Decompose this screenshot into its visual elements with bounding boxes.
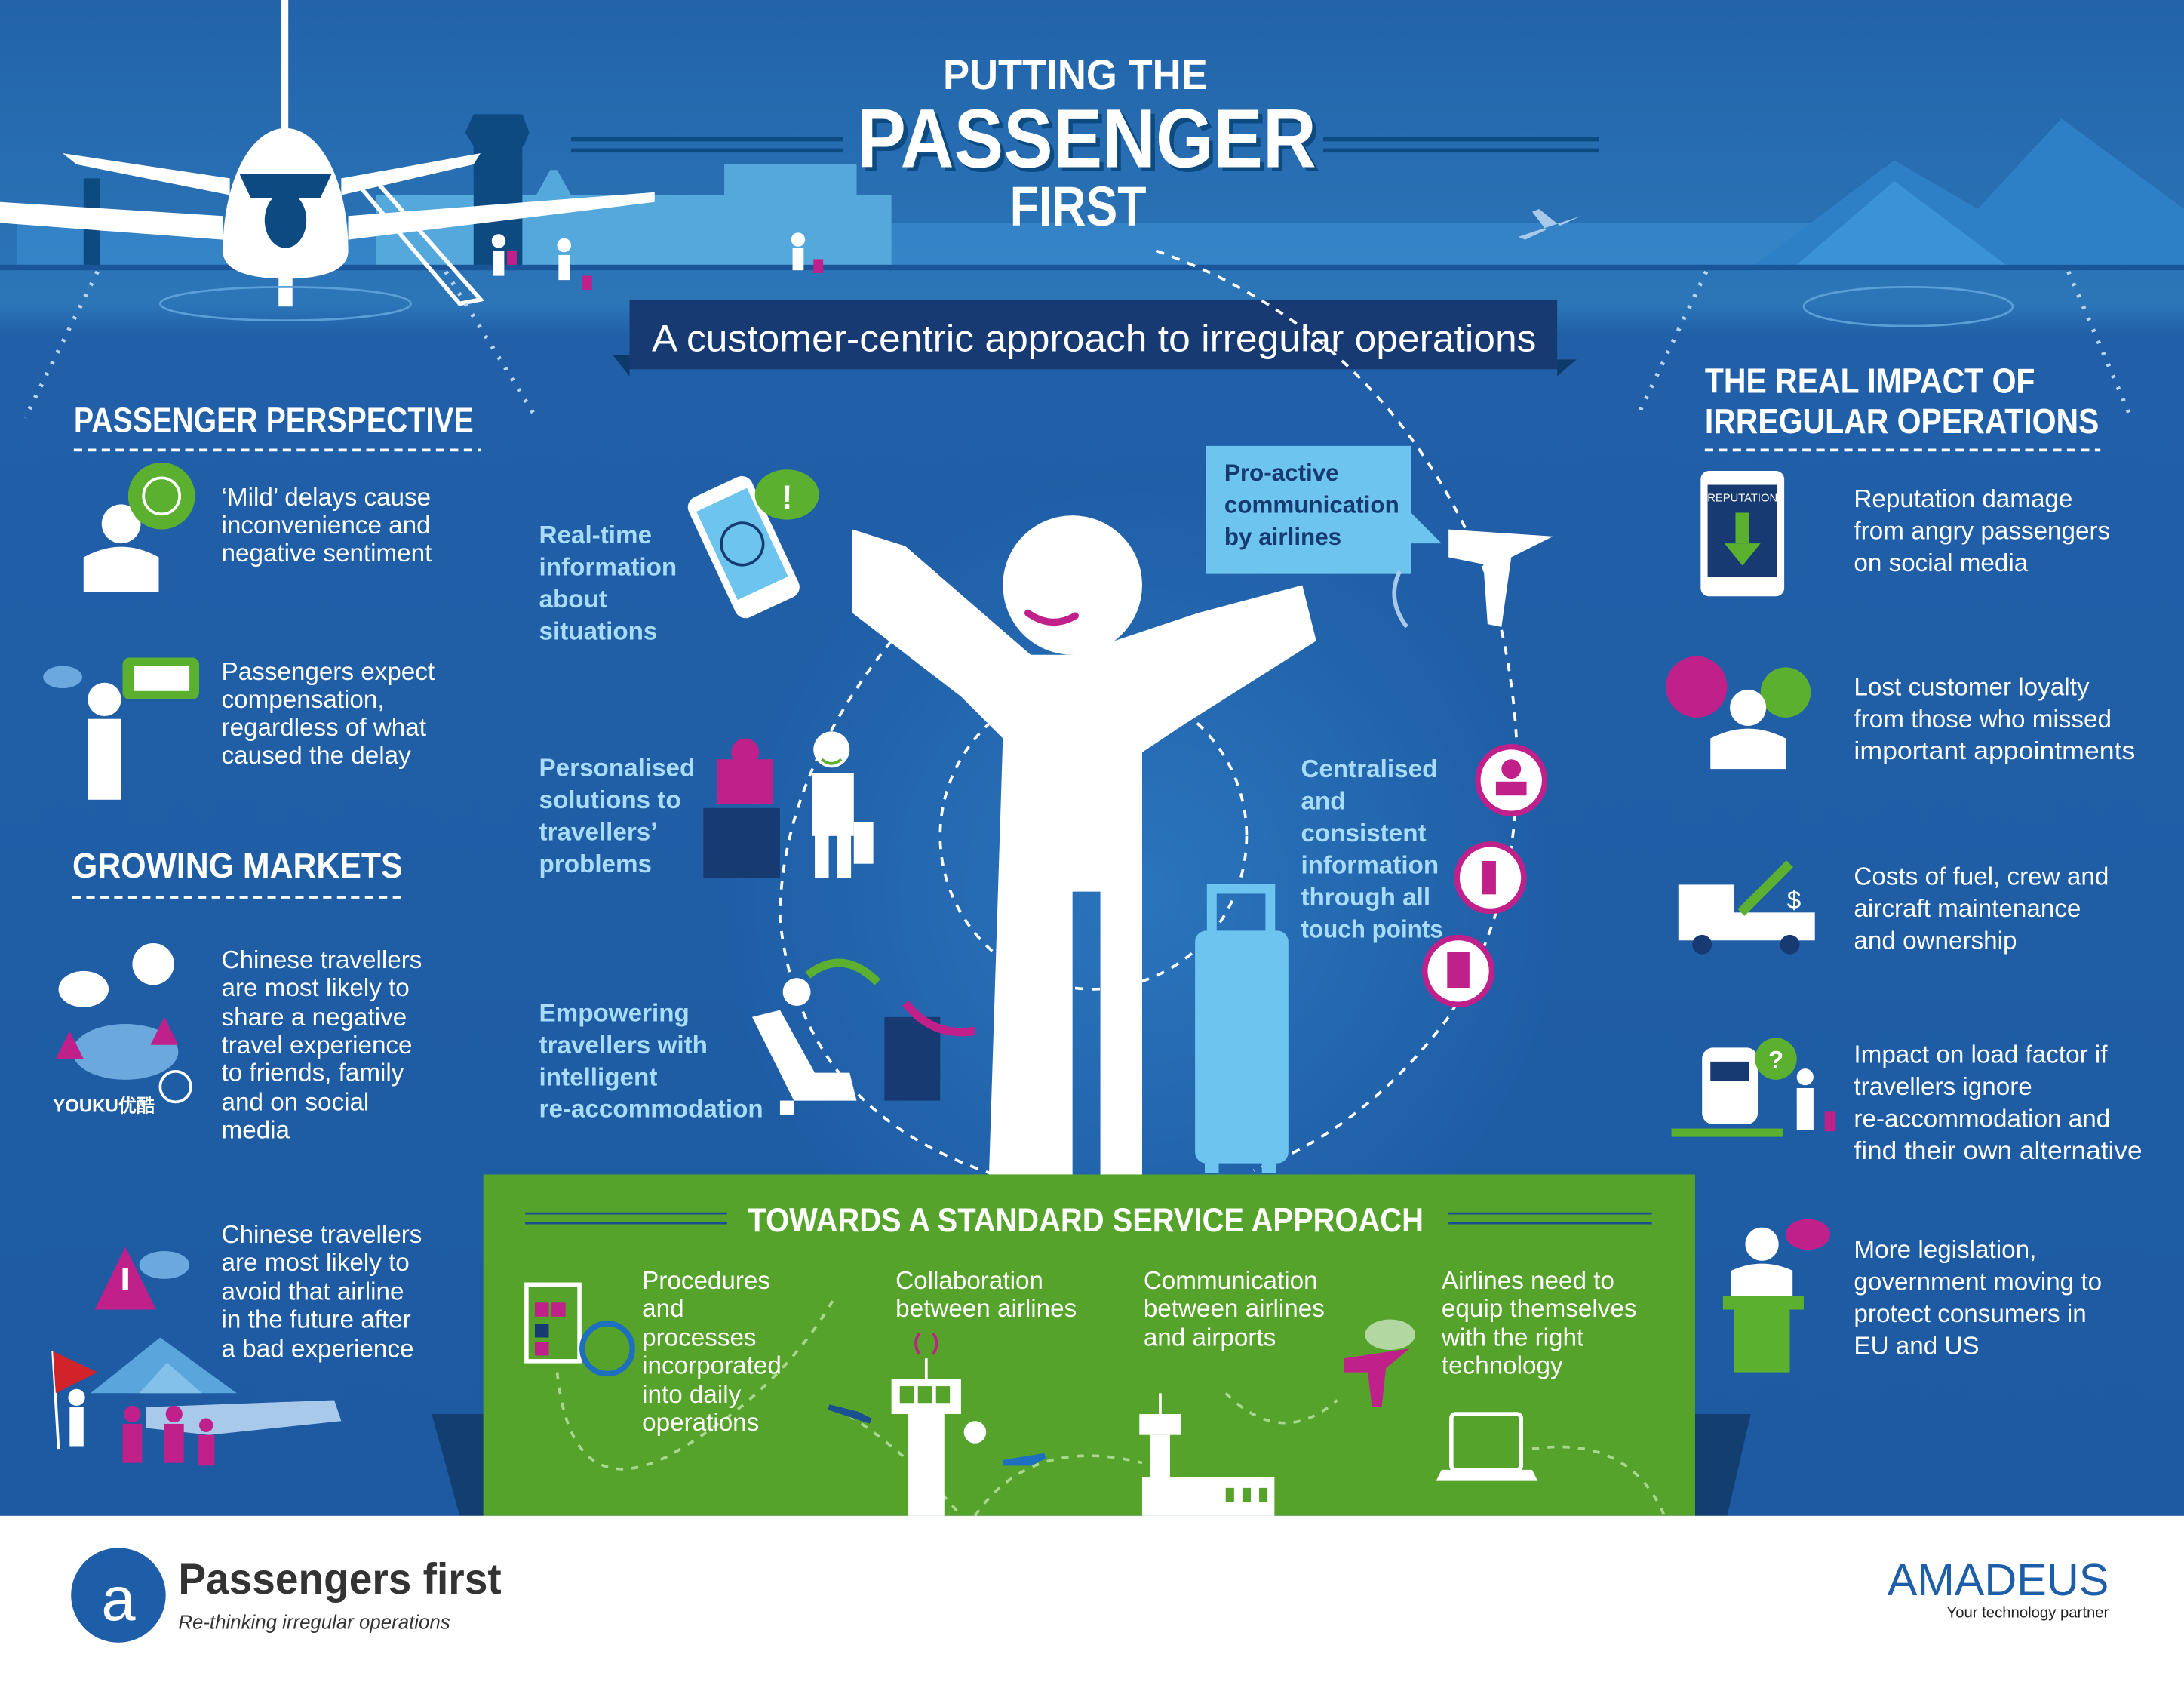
callout: pro-active communication: communication [1224, 491, 1399, 518]
icon: airport [1139, 1393, 1274, 1516]
callout: centralised: touch points [1301, 916, 1443, 944]
subtitle banner [613, 300, 1577, 377]
callout: centralised: consistent [1301, 819, 1427, 847]
panel: growing markets: avoid that airline [222, 1278, 404, 1306]
panel: towards a standard service approach: into daily [642, 1381, 742, 1409]
panel: towards a standard service approach: Airlines need to [1442, 1267, 1614, 1295]
panel: real impact: Costs of fuel, crew and [1854, 862, 2109, 890]
airplane [0, 0, 655, 321]
panel: real impact: government moving to [1854, 1268, 2102, 1296]
panel: towards a standard service approach: technology [1442, 1351, 1563, 1379]
callout: personalised solutions: problems [539, 850, 652, 878]
callout: real-time info: Real-time [539, 521, 652, 549]
panel: towards a standard service approach: incorporated [642, 1351, 782, 1379]
panel: growing markets: a bad experience [222, 1335, 413, 1363]
callout: empowering: intelligent [539, 1063, 657, 1091]
panel: real impact: EU and US [1854, 1333, 1980, 1361]
title [571, 51, 1599, 238]
icon: train: ? [1768, 1047, 1783, 1075]
icon: calendar stopwatch [527, 1284, 632, 1373]
panel: growing markets: share a negative [222, 1004, 407, 1032]
panel: towards a standard service approach: processes [642, 1324, 757, 1352]
big dashed circle [780, 251, 1517, 1177]
callout: real-time info: situations [539, 617, 657, 645]
panel: real impact: aircraft maintenance [1854, 895, 2081, 923]
icon: warning [95, 1247, 189, 1310]
panel: passenger perspective: caused the delay [222, 742, 411, 770]
logo: passengers first [71, 1548, 502, 1643]
icon: luggage [1195, 889, 1289, 1173]
panel: towards a standard service approach: between airlines [895, 1295, 1077, 1323]
panel: real impact: re-accommodation and [1854, 1105, 2110, 1133]
panel: passenger perspective: negative sentiment [222, 540, 432, 567]
callout: real-time info: ! [782, 479, 793, 516]
panel: passenger perspective: Passengers expect [222, 658, 435, 686]
icon: fuel truck [1679, 864, 1815, 955]
icon: reputation phone [1700, 471, 1784, 596]
panel: passenger perspective: inconvenience and [222, 512, 431, 540]
icon: pink plane and cloud [829, 1319, 1415, 1463]
panel: towards a standard service approach: between airlines [1144, 1295, 1325, 1323]
panel: passenger perspective: compensation, [222, 686, 385, 714]
icon: loyalty [1666, 656, 1811, 769]
panel: passenger perspective: regardless of what [222, 714, 426, 742]
callout: personalised solutions: solutions to [539, 786, 681, 814]
panel: real impact: protect consumers in [1854, 1300, 2087, 1328]
panel: towards a standard service approach: Collaboration [895, 1267, 1043, 1295]
panel: towards a standard service approach: operations [642, 1409, 759, 1437]
logo: passengers first: a [101, 1565, 136, 1634]
callout: personalised solutions: travellers’ [539, 818, 658, 846]
panel: growing markets: GROWING MARKETS [72, 846, 403, 885]
callout: real-time info: about [539, 586, 607, 613]
panel: growing markets: are most likely to [222, 1249, 410, 1277]
callout: empowering: re-accommodation [539, 1096, 763, 1124]
panel: passenger perspective: PASSENGER PERSPECTIVE [74, 400, 474, 439]
callout: centralised: through all [1301, 884, 1430, 912]
callout: personalised solutions [539, 731, 874, 878]
logo: passengers first: Passengers first [178, 1555, 502, 1603]
passengers top [492, 232, 805, 280]
icon: delay person [84, 463, 195, 592]
panel: towards a standard service approach: with the right [1441, 1324, 1583, 1352]
panel: real impact: on social media [1854, 549, 2029, 577]
panel: real impact: find their own alternative [1854, 1137, 2143, 1165]
panel: real impact: travellers ignore [1854, 1073, 2032, 1101]
panel: towards a standard service approach [432, 1174, 1751, 1516]
icon: laptop [1436, 1414, 1537, 1481]
callout: pro-active communication: Pro-active [1224, 460, 1339, 486]
icon: train [1672, 1038, 1835, 1137]
footer [0, 1516, 2184, 1688]
panel: real impact [1666, 361, 2143, 1373]
panel: real impact: important appointments [1854, 737, 2135, 765]
panel: towards a standard service approach: and airports [1144, 1324, 1276, 1352]
subtitle banner: A customer-centric approach to irregular operations [652, 317, 1536, 359]
panel: growing markets: and on social [222, 1089, 369, 1117]
callout: centralised: information [1301, 852, 1439, 880]
callout: pro-active communication: by airlines [1224, 524, 1341, 550]
panel: real impact: Lost customer loyalty [1854, 673, 2090, 701]
small plane icon top right [1518, 209, 1581, 240]
callout: personalised solutions: Personalised [539, 754, 695, 782]
icon: control tower [892, 1333, 986, 1516]
panel: growing markets: in the future after [222, 1306, 411, 1334]
title: FIRST [1010, 175, 1147, 238]
panel: real impact: and ownership [1854, 927, 2017, 955]
panel: towards a standard service approach: and [642, 1295, 684, 1323]
panel: towards a standard service approach: TOWARDS A STANDARD SERVICE APPROACH [748, 1202, 1424, 1239]
callout: empowering: travellers with [539, 1032, 708, 1059]
logo: passengers first: Re-thinking irregular operations [178, 1612, 450, 1633]
callout: centralised: and [1301, 788, 1346, 816]
panel: passenger perspective [43, 400, 481, 800]
icon: reputation phone: REPUTATION [1707, 493, 1777, 505]
panel: growing markets: to friends, family [222, 1059, 404, 1087]
icon: fuel truck: $ [1787, 887, 1801, 915]
panel: growing markets: travel experience [222, 1032, 413, 1059]
logo: amadeus: AMADEUS [1888, 1555, 2109, 1605]
panel: real impact: THE REAL IMPACT OF [1705, 361, 2035, 401]
logo: amadeus: Your technology partner [1947, 1605, 2109, 1622]
callout: empowering: Empowering [539, 999, 690, 1027]
title: PASSENGER [856, 93, 1316, 186]
icon: social media [53, 943, 191, 1116]
callout: centralised: Centralised [1301, 755, 1437, 783]
title: PUTTING THE [943, 51, 1208, 98]
panel: growing markets: Chinese travellers [222, 1221, 422, 1249]
panel: towards a standard service approach: Communication [1144, 1267, 1318, 1295]
panel: growing markets: Chinese travellers [222, 946, 422, 974]
panel: growing markets [53, 846, 422, 1465]
panel: towards a standard service approach: Procedures [642, 1267, 770, 1295]
illustration: travellers and plane [53, 1337, 341, 1465]
panel: passenger perspective: ‘Mild’ delays cause [222, 484, 431, 512]
runway dots [25, 272, 2131, 418]
callout: empowering [539, 963, 975, 1124]
panel: growing markets: are most likely to [222, 974, 410, 1002]
panel: real impact: from those who missed [1854, 706, 2112, 733]
icon: social media: YOUKU优酷 [53, 1095, 155, 1116]
panel: real impact: More legislation, [1854, 1236, 2036, 1264]
panel: real impact: IRREGULAR OPERATIONS [1705, 401, 2099, 441]
callout: real-time info [539, 469, 819, 645]
callout: centralised [1301, 747, 1545, 1004]
icon: compensation [43, 657, 199, 800]
panel: growing markets: media [222, 1116, 290, 1144]
icon: legislation podium [1723, 1219, 1830, 1373]
callout: pro-active communication [1206, 446, 1553, 627]
panel: real impact: from angry passengers [1854, 518, 2110, 546]
panel: towards a standard service approach: equip themselves [1442, 1295, 1636, 1323]
panel: real impact: Reputation damage [1854, 485, 2072, 513]
skyline [0, 114, 2184, 270]
panel: real impact: Impact on load factor if [1854, 1041, 2108, 1069]
title: PASSENGER [861, 97, 1320, 189]
callout: real-time info: information [539, 554, 677, 582]
central figure [852, 515, 1316, 1177]
